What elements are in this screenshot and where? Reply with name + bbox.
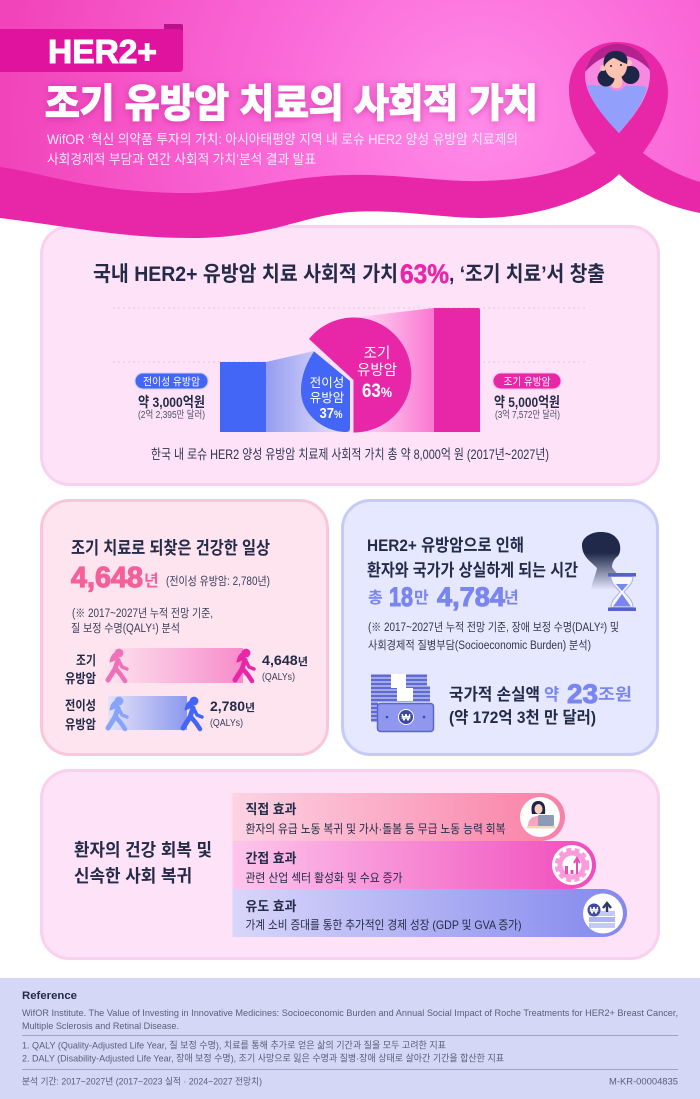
reference heading: Reference — [22, 990, 77, 1002]
icon: money stack — [371, 674, 434, 732]
right label: early value: 조기 유방암 — [504, 376, 551, 388]
national loss amount: 국가적 손실액 — [449, 685, 540, 704]
left label: metastatic value — [135, 373, 208, 421]
chart: value flow bars and pie: 유방암 — [310, 391, 345, 405]
method note — [71, 607, 213, 635]
effect bar: indirect: 간접 효과 — [246, 851, 297, 866]
left label: metastatic value: 약 3,000억원 — [138, 394, 205, 410]
bar: metastatic breast cancer QALYs — [65, 696, 255, 732]
effect bar: induced: 유도 효과 — [246, 899, 297, 914]
analysis period: 분석 기간: 2017~2027년 (2017~2023 실적 · 2024~2027 전망치) — [22, 1076, 262, 1086]
panel heading — [74, 840, 212, 886]
panel: references footer — [0, 978, 700, 1099]
key number 18만 4,784년: 총 — [368, 589, 383, 607]
HER2+ tag: HER2+ — [48, 33, 157, 70]
reference citation: Multiple Sclerosis and Retinal Disease. — [22, 1021, 179, 1032]
bar: metastatic breast cancer QALYs: 2,780년 — [210, 699, 255, 714]
bar: early breast cancer QALYs — [65, 648, 308, 686]
key number 18만 4,784년 — [368, 582, 519, 612]
icon: money stack: ₩ — [402, 712, 411, 724]
wave band — [0, 153, 619, 238]
reference citation — [22, 1008, 678, 1032]
bar: early breast cancer QALYs: 4,648년 — [262, 653, 308, 668]
illustration: woman in ribbon loop — [585, 44, 650, 133]
panel heading: 환자의 건강 회복 및 — [74, 840, 212, 860]
icon: silhouette and hourglass — [582, 532, 636, 611]
national loss amount: (약 172억 3천 만 달러) — [449, 708, 596, 727]
panel heading — [367, 536, 578, 580]
key number 4,648: 4,648 — [71, 562, 143, 594]
left label: metastatic value: 전이성 유방암 — [143, 376, 200, 388]
card heading: , ‘조기 치료’서 창출 — [449, 263, 605, 286]
panel: recovery and return to society — [42, 770, 658, 958]
bar: metastatic breast cancer QALYs: 전이성 — [65, 698, 96, 713]
effect bar: induced: ₩ — [590, 906, 599, 916]
header banner — [0, 0, 700, 238]
chart: value flow bars and pie: 전이성 — [310, 376, 344, 390]
effect bar: induced — [232, 889, 627, 937]
chart: value flow bars and pie — [220, 308, 480, 433]
effect bar: induced: 가계 소비 증대를 통한 추가적인 경제 성장 (GDP 및 GVA 증가) — [246, 918, 522, 932]
key number 18만 4,784년: 만 — [414, 589, 429, 607]
chart: value flow bars and pie: 조기 — [364, 345, 390, 362]
method note: 사회경제적 질병부담(Socioeconomic Burden) 분석) — [368, 638, 591, 652]
bar: early breast cancer QALYs: 유방암 — [65, 671, 96, 686]
effect bar: indirect: 관련 산업 섹터 활성화 및 수요 증가 — [246, 871, 402, 885]
national loss amount: 23 — [567, 679, 598, 709]
left label: metastatic value: (2억 2,395만 달러) — [138, 409, 205, 421]
panel heading: 신속한 사회 복귀 — [74, 866, 192, 886]
subtitle: 사회경제적 부담과 연간 사회적 가치’분석 결과 발표 — [47, 152, 316, 167]
chart: value flow bars and pie: 63% — [362, 381, 392, 402]
reference citation: WifOR Institute. The Value of Investing in Innovative Medicines: Socioeconomic Burden and Annual Social Impact of Roche Treatments for HER2+ Breast Cancer, — [22, 1008, 678, 1019]
card heading — [93, 259, 605, 289]
key number 4,648 — [71, 562, 270, 594]
key number 18만 4,784년: 년 — [504, 589, 519, 607]
document code: M-KR-00004835 — [609, 1076, 678, 1088]
key number 4,648: (전이성 유방암: 2,780년) — [166, 575, 270, 588]
panel: healthy days regained — [42, 500, 328, 754]
panel heading: 조기 치료로 되찾은 건강한 일상 — [71, 538, 270, 558]
panel heading: 환자와 국가가 상실하게 되는 시간 — [367, 561, 578, 580]
key number 4,648: 년 — [144, 572, 159, 590]
method note: (※ 2017~2027년 누적 전망 기준, 장애 보정 수명(DALY²) 및 — [368, 621, 619, 634]
national loss amount — [449, 679, 632, 727]
main title: 조기 유방암 치료의 사회적 가치 — [45, 83, 538, 126]
panel heading: HER2+ 유방암으로 인해 — [367, 536, 524, 555]
chart: value flow bars and pie: 유방암 — [357, 362, 397, 379]
ribbon — [569, 42, 700, 213]
national loss amount: 조원 — [598, 685, 632, 704]
panel: time lost — [342, 500, 658, 754]
effect bar: indirect — [232, 841, 596, 889]
key number 18만 4,784년: 4,784 — [437, 582, 505, 612]
subtitle — [47, 132, 518, 167]
effect bar: direct — [232, 793, 565, 841]
total value caption: 한국 내 로슈 HER2 양성 유방암 치료제 사회적 가치 총 약 8,000억 원 (2017년~2027년) — [151, 447, 549, 462]
right label: early value — [493, 373, 561, 421]
HER2+ tag — [0, 24, 183, 72]
key number 18만 4,784년: 18 — [389, 582, 413, 612]
effect bar: direct: 환자의 유급 노동 복귀 및 가사·돌봄 등 무급 노동 능력 회복 — [246, 822, 506, 836]
bar: early breast cancer QALYs: 조기 — [76, 653, 96, 668]
method note: 질 보정 수명(QALY¹) 분석 — [71, 622, 180, 635]
chart: value flow bars and pie: 37% — [320, 405, 343, 422]
bar: metastatic breast cancer QALYs: (QALYs) — [210, 717, 243, 729]
bar: metastatic breast cancer QALYs: 유방암 — [65, 717, 96, 732]
method note: (※ 2017~2027년 누적 전망 기준, — [72, 607, 213, 620]
footnotes — [22, 1040, 504, 1064]
card heading: 국내 HER2+ 유방암 치료 사회적 가치 — [93, 263, 398, 286]
right label: early value: 약 5,000억원 — [494, 394, 560, 410]
effect bar: direct: 직접 효과 — [246, 802, 297, 817]
right label: early value: (3억 7,572만 달러) — [495, 409, 560, 421]
panel: societal value card — [42, 226, 658, 484]
card heading: 63% — [400, 259, 449, 289]
method note — [368, 621, 619, 652]
footnotes: 1. QALY (Quality-Adjusted Life Year, 질 보정 수명), 치료를 통해 추가로 얻은 삶의 기간과 질을 모두 고려한 지표 — [22, 1040, 446, 1052]
bar: early breast cancer QALYs: (QALYs) — [262, 671, 295, 683]
national loss amount: 약 — [544, 685, 559, 704]
footnotes: 2. DALY (Disability-Adjusted Life Year, 장애 보정 수명), 조기 사망으로 잃은 수명과 질병·장애 상태로 살아간 기간을 합산한 지표 — [22, 1052, 504, 1064]
subtitle: WifOR ‘혁신 의약품 투자의 가치: 아시아태평양 지역 내 로슈 HER2 양성 유방암 치료제의 — [47, 132, 518, 147]
